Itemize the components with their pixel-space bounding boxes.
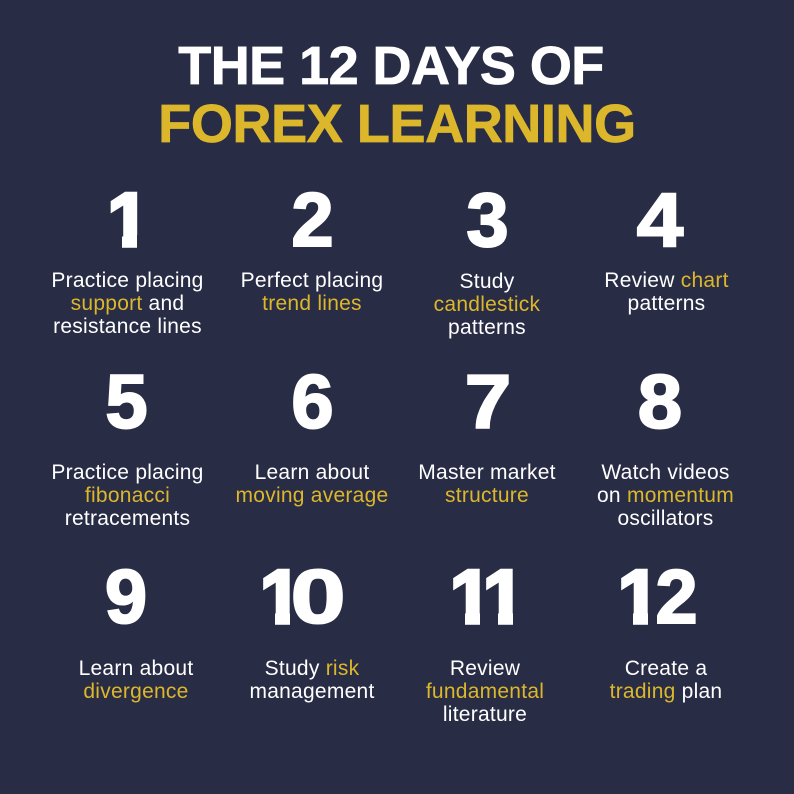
number 10: 0 (291, 555, 346, 640)
number 8: 8 (637, 360, 682, 445)
caption 8: oscillators (617, 507, 714, 530)
caption 5 (51, 461, 204, 530)
caption 10: Study risk (265, 657, 359, 680)
caption 7 (418, 461, 556, 507)
caption 12: trading plan (610, 680, 722, 703)
caption 2: trend lines (262, 292, 362, 315)
caption 8 (597, 461, 734, 530)
caption 3: candlestick (434, 293, 540, 316)
caption 4: Review chart (604, 269, 729, 292)
number 5: 5 (105, 360, 148, 445)
number 2: 2 (291, 178, 334, 263)
caption 11: fundamental (426, 680, 544, 703)
caption 1: Practice placing (51, 269, 204, 292)
caption 8: Watch videos (601, 461, 730, 484)
number 6: 6 (291, 360, 334, 445)
caption 6 (236, 461, 388, 507)
caption 5: fibonacci (85, 484, 170, 507)
caption 10: management (249, 680, 375, 703)
caption 2 (241, 269, 383, 315)
caption 7: Master market (418, 461, 556, 484)
caption 10 (249, 657, 375, 703)
caption 9: divergence (83, 680, 189, 703)
caption 3: Study (460, 270, 514, 293)
number 1: 1 (107, 178, 150, 263)
caption 11: Review (450, 657, 520, 680)
number 12 (618, 555, 698, 640)
number 9: 9 (105, 555, 147, 640)
caption 3: patterns (448, 316, 526, 339)
caption 9 (79, 657, 194, 703)
caption 7: structure (445, 484, 529, 507)
caption 4: patterns (628, 292, 705, 315)
number 12: 2 (655, 555, 698, 640)
number 12: 1 (618, 555, 660, 640)
number 11: 1 (450, 555, 492, 640)
caption 8: on momentum (597, 484, 734, 507)
number 11 (450, 555, 525, 640)
caption 5: retracements (65, 507, 190, 530)
caption 11: literature (443, 703, 527, 726)
caption 12: Create a (625, 657, 707, 680)
caption 2: Perfect placing (241, 269, 383, 292)
caption 6: moving average (236, 484, 388, 507)
caption 9: Learn about (79, 657, 193, 680)
caption 12 (610, 657, 722, 703)
title: THE 12 DAYS OF (178, 36, 604, 96)
number 10 (260, 555, 346, 640)
number 10: 1 (260, 555, 302, 640)
caption 6: Learn about (255, 461, 369, 484)
number 11: 1 (483, 555, 525, 640)
caption 4 (604, 269, 729, 315)
caption 3 (434, 270, 540, 339)
caption 11 (426, 657, 544, 726)
number 3: 3 (466, 178, 509, 263)
title (158, 36, 636, 154)
number 4: 4 (636, 178, 683, 263)
caption 1: resistance lines (53, 315, 202, 338)
caption 1: support and (71, 292, 184, 315)
caption 1 (51, 269, 204, 338)
number 7: 7 (464, 360, 511, 445)
title: FOREX LEARNING (158, 94, 636, 154)
caption 5: Practice placing (51, 461, 204, 484)
